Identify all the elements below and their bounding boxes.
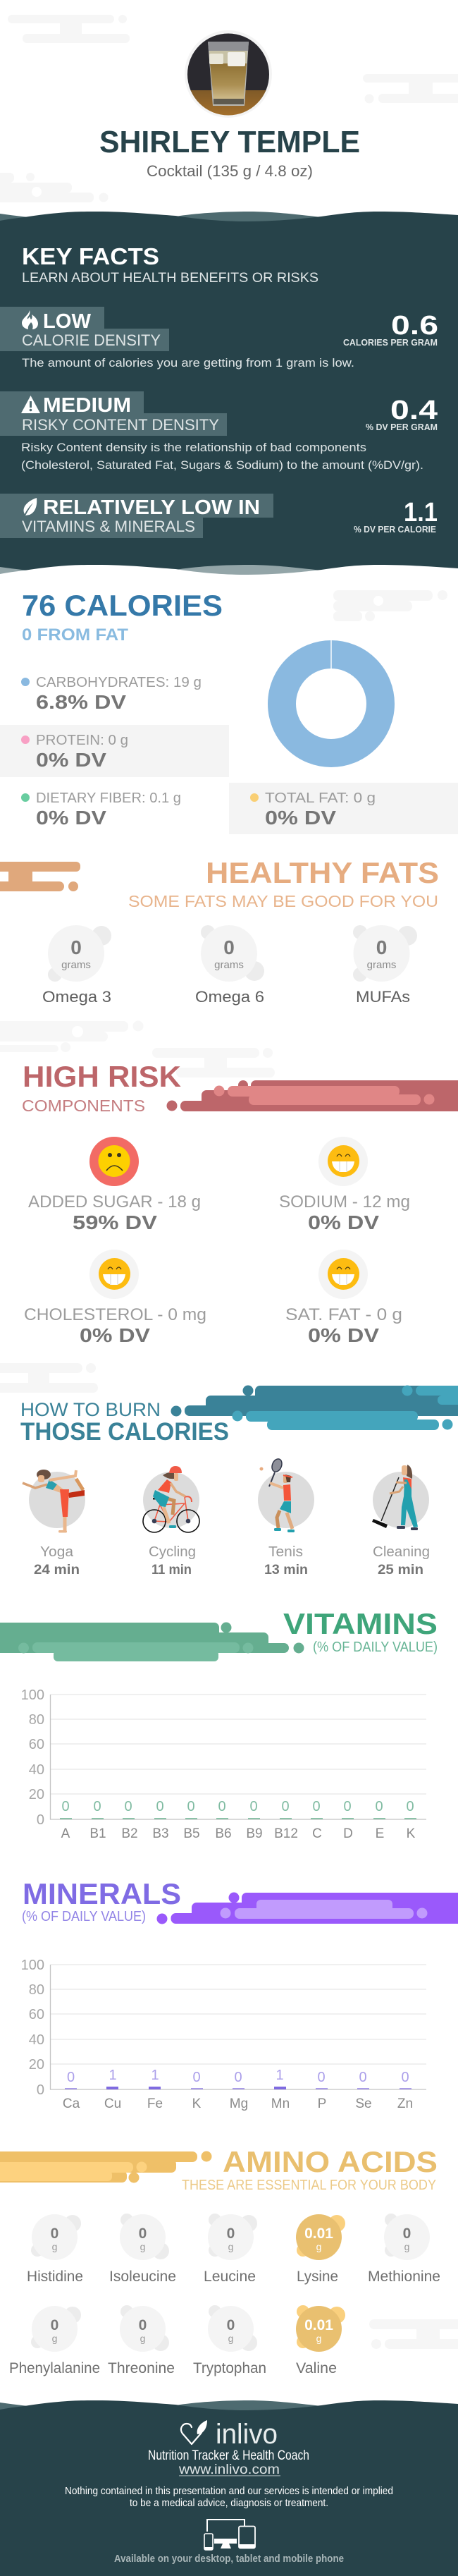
stat: mufas: 0 bbox=[376, 936, 387, 958]
heading: minerals: MINERALS bbox=[23, 1877, 181, 1910]
panel: amino acids bbox=[0, 2145, 440, 2376]
panel: healthy fats bbox=[0, 856, 439, 1006]
bar chart: vitamins bbox=[21, 1687, 426, 1841]
panel: high risk components bbox=[22, 1060, 458, 1346]
bar chart: vitamins: 0 bbox=[187, 1799, 195, 1814]
amino: threonine: Threonine bbox=[108, 2360, 175, 2376]
bar chart: vitamins: C bbox=[312, 1826, 322, 1841]
activity: cycling bbox=[143, 1466, 199, 1532]
stat: omega 3: grams bbox=[61, 959, 91, 971]
bar chart: minerals: 1 bbox=[109, 2068, 117, 2083]
panel: key facts bbox=[0, 212, 458, 586]
fact: calorie density: CALORIE DENSITY bbox=[22, 331, 161, 349]
bar chart: minerals: Mg bbox=[230, 2096, 248, 2111]
amino: isoleucine: 0 bbox=[139, 2226, 147, 2242]
amino: lysine: Lysine bbox=[297, 2269, 338, 2285]
stat: omega 6: grams bbox=[214, 959, 244, 971]
macro: carbohydrates bbox=[21, 675, 202, 713]
fact: risky content density: 0.4 bbox=[390, 396, 438, 425]
amino: histidine: 0 bbox=[51, 2226, 58, 2242]
amino: phenylalanine bbox=[9, 2306, 100, 2376]
heading: 76 calories: 76 CALORIES bbox=[22, 589, 223, 622]
bar chart: vitamins: 0 bbox=[281, 1799, 290, 1814]
amino: tryptophan: Tryptophan bbox=[193, 2360, 266, 2376]
disclaimer bbox=[65, 2485, 393, 2509]
activity labels: Yoga bbox=[40, 1544, 74, 1560]
bar chart: vitamins: E bbox=[376, 1826, 384, 1841]
bar chart: minerals: Mn bbox=[271, 2096, 290, 2111]
bar chart: vitamins: 0 bbox=[375, 1799, 383, 1814]
amino: valine: g bbox=[316, 2333, 321, 2344]
heading: amino acids: AMINO ACIDS bbox=[223, 2145, 438, 2178]
amino: tryptophan bbox=[193, 2305, 266, 2376]
amino: phenylalanine: g bbox=[52, 2333, 57, 2344]
fact: risky content density: (Cholesterol, Saturated Fat, Sugars & Sodium) to the amount (%DV/gr). bbox=[21, 458, 423, 472]
bar chart: vitamins: 0 bbox=[343, 1799, 352, 1814]
risk: saturated fat: 0% DV bbox=[308, 1324, 379, 1346]
panel: footer bbox=[0, 2400, 458, 2576]
stat: omega 6: 0 bbox=[223, 936, 235, 958]
risk: added sugar: 59% DV bbox=[73, 1211, 157, 1233]
decoration: amino blob bbox=[0, 2151, 211, 2183]
risk: sodium: SODIUM - 12 mg bbox=[279, 1192, 410, 1211]
bar chart: minerals: 0 bbox=[192, 2070, 201, 2085]
fact: vitamins and minerals bbox=[0, 494, 438, 538]
website link: www.inlivo.com bbox=[178, 2462, 280, 2477]
bar chart: minerals: 0 bbox=[359, 2070, 367, 2085]
amino: isoleucine: Isoleucine bbox=[109, 2269, 176, 2285]
bar chart: minerals: 0 bbox=[234, 2070, 242, 2085]
subheading: daily value: (% OF DAILY VALUE) bbox=[313, 1640, 438, 1655]
bar chart: minerals: Ca bbox=[63, 2096, 80, 2111]
amino: histidine bbox=[27, 2214, 83, 2285]
tagline: Nutrition Tracker & Health Coach bbox=[148, 2448, 309, 2463]
fact: risky content density: RISKY CONTENT DENSITY bbox=[22, 416, 219, 434]
amino: histidine: g bbox=[52, 2241, 57, 2252]
fact: calorie density: The amount of calories you are getting from 1 gram is low. bbox=[22, 356, 354, 370]
activity labels: 11 min bbox=[151, 1563, 192, 1577]
subheading: from fat: 0 FROM FAT bbox=[22, 625, 128, 645]
amino: leucine bbox=[204, 2214, 257, 2285]
bar chart: vitamins: 0 bbox=[312, 1799, 321, 1814]
donut chart bbox=[282, 640, 380, 753]
panel: how to burn those calories bbox=[20, 1385, 458, 1577]
heading: healthy fats: HEALTHY FATS bbox=[206, 856, 439, 889]
bar chart: minerals: 0 bbox=[317, 2070, 326, 2085]
stat: omega 3: Omega 3 bbox=[42, 988, 111, 1006]
bar chart: minerals: 1 bbox=[276, 2068, 284, 2083]
stat: mufas: grams bbox=[367, 959, 396, 971]
macro: protein bbox=[0, 725, 229, 777]
fact: vitamins and minerals: % DV PER CALORIE bbox=[354, 525, 436, 535]
amino: lysine: 0.01 bbox=[304, 2226, 333, 2242]
amino: leucine: Leucine bbox=[204, 2269, 256, 2285]
bar chart: minerals: K bbox=[192, 2096, 202, 2111]
amino: isoleucine bbox=[109, 2214, 176, 2285]
amino: tryptophan: 0 bbox=[227, 2317, 235, 2333]
bar chart: vitamins: B6 bbox=[215, 1826, 232, 1841]
macro: dietary fiber: DIETARY FIBER: 0.1 g bbox=[36, 790, 181, 806]
fact: risky content density: % DV PER GRAM bbox=[366, 422, 438, 432]
fact: vitamins and minerals: VITAMINS & MINERALS bbox=[22, 518, 195, 535]
icon: flame bbox=[22, 310, 38, 329]
bar chart: minerals: 0 bbox=[37, 2082, 44, 2098]
bar chart: minerals: 0 bbox=[401, 2070, 409, 2085]
stat: omega 3 bbox=[42, 925, 111, 1006]
subheading: some fats: SOME FATS MAY BE GOOD FOR YOU bbox=[128, 892, 438, 910]
bar chart: minerals: 1 bbox=[151, 2068, 159, 2083]
fact: calorie density bbox=[0, 307, 438, 370]
fact: risky content density: MEDIUM bbox=[43, 394, 131, 417]
fact: calorie density: LOW bbox=[43, 310, 92, 333]
food photo bbox=[183, 28, 275, 118]
activity: yoga bbox=[23, 1470, 85, 1533]
availability note: Available on your desktop, tablet and mobile phone bbox=[114, 2553, 344, 2565]
bar chart: vitamins: 0 bbox=[406, 1799, 414, 1814]
bar chart: vitamins: K bbox=[407, 1826, 416, 1841]
bar chart: vitamins: 0 bbox=[249, 1799, 258, 1814]
heading: learn about health: LEARN ABOUT HEALTH BENEFITS OR RISKS bbox=[22, 270, 318, 286]
bar chart: minerals bbox=[21, 1958, 426, 2111]
bar chart: vitamins: B3 bbox=[152, 1826, 169, 1841]
decoration: vitamins blob bbox=[0, 1622, 304, 1661]
bar chart: vitamins: 0 bbox=[124, 1799, 132, 1814]
amino: isoleucine: g bbox=[140, 2241, 145, 2252]
macro: total fat bbox=[229, 783, 458, 834]
title: SHIRLEY TEMPLE bbox=[99, 125, 360, 159]
fact: risky content density: Risky Content density is the relationship of bad components bbox=[21, 441, 366, 454]
bar chart: vitamins: 0 bbox=[37, 1812, 44, 1828]
logo: inlivo: inlivo bbox=[216, 2419, 278, 2450]
bar chart: vitamins: 0 bbox=[156, 1799, 164, 1814]
panel: vitamins bbox=[0, 1607, 438, 1841]
bar chart: vitamins: 0 bbox=[93, 1799, 101, 1814]
subheading: essential: THESE ARE ESSENTIAL FOR YOUR BODY bbox=[182, 2178, 436, 2193]
icon: leaf bbox=[24, 498, 37, 515]
risk: cholesterol: 0% DV bbox=[80, 1324, 150, 1346]
amino: phenylalanine: 0 bbox=[51, 2317, 58, 2333]
macro: total fat: 0% DV bbox=[265, 807, 336, 829]
activity labels: Tenis bbox=[268, 1544, 303, 1560]
bar chart: vitamins: D bbox=[343, 1826, 353, 1841]
fact: vitamins and minerals: 1.1 bbox=[404, 498, 438, 527]
stat: omega 6 bbox=[195, 925, 264, 1006]
bar chart: minerals: 20 bbox=[29, 2057, 44, 2073]
fact: vitamins and minerals: RELATIVELY LOW IN bbox=[43, 496, 260, 519]
bar chart: minerals: P bbox=[318, 2096, 326, 2111]
fact: calorie density: 0.6 bbox=[391, 311, 438, 341]
bar chart: vitamins: 0 bbox=[61, 1799, 70, 1814]
bar chart: vitamins: A bbox=[61, 1826, 70, 1841]
bar chart: vitamins: 0 bbox=[218, 1799, 226, 1814]
bar chart: minerals: Zn bbox=[397, 2096, 413, 2111]
heading: key facts: KEY FACTS bbox=[22, 243, 159, 269]
disclaimer: Nothing contained in this presentation and our services is intended or implied bbox=[65, 2485, 393, 2497]
risk: cholesterol bbox=[24, 1250, 206, 1346]
macro: protein: PROTEIN: 0 g bbox=[36, 733, 128, 748]
bar chart: vitamins: B5 bbox=[183, 1826, 200, 1841]
stat: mufas: MUFAs bbox=[356, 988, 410, 1006]
amino: phenylalanine: Phenylalanine bbox=[9, 2360, 100, 2376]
decoration: risk blob bbox=[166, 1080, 458, 1111]
fact: risky content density bbox=[0, 391, 438, 472]
bar chart: minerals: 100 bbox=[21, 1958, 44, 1973]
activity labels: Cycling bbox=[149, 1544, 196, 1560]
subheading: daily value: (% OF DAILY VALUE) bbox=[22, 1909, 146, 1924]
risk: added sugar: ADDED SUGAR - 18 g bbox=[28, 1192, 201, 1211]
subheading: components: COMPONENTS bbox=[22, 1097, 145, 1115]
amino: leucine: 0 bbox=[227, 2226, 235, 2242]
bar chart: vitamins: B2 bbox=[121, 1826, 138, 1841]
heading: vitamins: VITAMINS bbox=[283, 1607, 438, 1640]
heading: how to burn: HOW TO BURN bbox=[20, 1399, 161, 1420]
panel: minerals bbox=[21, 1877, 458, 2111]
bar chart: minerals: 40 bbox=[29, 2032, 44, 2048]
bar chart: vitamins: 20 bbox=[29, 1787, 44, 1802]
amino: valine: Valine bbox=[296, 2360, 337, 2376]
amino: threonine bbox=[108, 2305, 175, 2376]
macro: carbohydrates: 6.8% DV bbox=[36, 691, 126, 713]
bar chart: minerals: 60 bbox=[29, 2007, 44, 2022]
amino: leucine: g bbox=[228, 2241, 233, 2252]
bar chart: vitamins: B1 bbox=[89, 1826, 106, 1841]
activity: cleaning bbox=[372, 1465, 429, 1530]
activity labels: Cleaning bbox=[373, 1544, 430, 1560]
icon: devices bbox=[204, 2520, 255, 2550]
activity labels bbox=[34, 1544, 430, 1577]
bar chart: vitamins: B9 bbox=[246, 1826, 263, 1841]
subtitle: Cocktail (135 g / 4.8 oz) bbox=[147, 162, 313, 180]
decoration: burn blob bbox=[171, 1385, 458, 1430]
fact: calorie density: CALORIES PER GRAM bbox=[343, 338, 438, 348]
panel: calories bbox=[0, 589, 458, 834]
stat: omega 3: 0 bbox=[70, 936, 82, 958]
decoration: fats blob bbox=[0, 862, 80, 891]
amino: valine: 0.01 bbox=[304, 2317, 333, 2333]
activity: tennis bbox=[258, 1458, 314, 1532]
macro: dietary fiber bbox=[21, 790, 181, 829]
bar chart: minerals: 0 bbox=[67, 2070, 75, 2085]
macro: protein: 0% DV bbox=[36, 749, 106, 771]
risk: saturated fat: SAT. FAT - 0 g bbox=[285, 1305, 402, 1324]
bar chart: minerals: 80 bbox=[29, 1982, 44, 1998]
amino: histidine: Histidine bbox=[27, 2269, 83, 2285]
risk: cholesterol: CHOLESTEROL - 0 mg bbox=[24, 1305, 206, 1324]
bar chart: vitamins: B12 bbox=[274, 1826, 298, 1841]
bar chart: vitamins: 100 bbox=[21, 1687, 44, 1703]
amino: methionine bbox=[368, 2214, 440, 2285]
activity labels: 24 min bbox=[34, 1563, 80, 1577]
bar chart: minerals: Cu bbox=[104, 2096, 121, 2111]
macro: dietary fiber: 0% DV bbox=[36, 807, 106, 829]
risk: added sugar bbox=[28, 1137, 201, 1233]
amino: threonine: g bbox=[140, 2333, 145, 2344]
amino: valine bbox=[296, 2305, 345, 2376]
disclaimer: to be a medical advice, diagnosis or treatment. bbox=[130, 2497, 328, 2509]
activity labels: 13 min bbox=[264, 1563, 308, 1577]
amino: threonine: 0 bbox=[139, 2317, 147, 2333]
bar chart: vitamins: 80 bbox=[29, 1712, 44, 1728]
amino: lysine bbox=[296, 2214, 345, 2285]
bar chart: minerals: Se bbox=[355, 2096, 372, 2111]
decoration: minerals blob bbox=[156, 1893, 458, 1924]
bar chart: vitamins: 40 bbox=[29, 1762, 44, 1778]
heading: those calories: THOSE CALORIES bbox=[20, 1418, 229, 1446]
logo: inlivo bbox=[181, 2419, 278, 2450]
amino: lysine: g bbox=[316, 2241, 321, 2252]
risk: sodium bbox=[279, 1137, 410, 1233]
bar chart: minerals: Fe bbox=[147, 2096, 163, 2111]
amino: tryptophan: g bbox=[228, 2333, 233, 2344]
macro: total fat: TOTAL FAT: 0 g bbox=[265, 790, 376, 806]
activity labels: 25 min bbox=[378, 1563, 423, 1577]
amino: methionine: 0 bbox=[403, 2226, 411, 2242]
heading: high risk: HIGH RISK bbox=[23, 1060, 181, 1093]
icon: warning triangle bbox=[21, 396, 40, 413]
amino: methionine: Methionine bbox=[368, 2269, 440, 2285]
macro: carbohydrates: CARBOHYDRATES: 19 g bbox=[36, 675, 202, 690]
amino: methionine: g bbox=[404, 2241, 409, 2252]
bar chart: vitamins: 60 bbox=[29, 1737, 44, 1752]
risk: saturated fat bbox=[285, 1250, 402, 1346]
stat: omega 6: Omega 6 bbox=[195, 988, 264, 1006]
risk: sodium: 0% DV bbox=[308, 1211, 379, 1233]
stat: mufas bbox=[353, 925, 417, 1006]
